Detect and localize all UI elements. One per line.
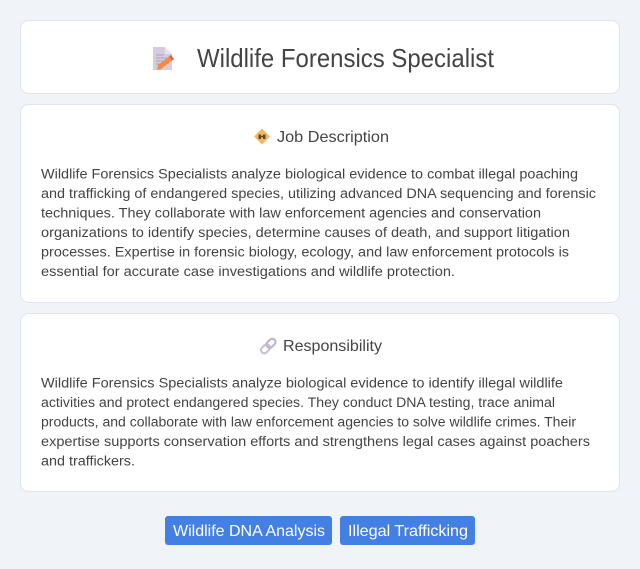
heading: responsibility: Responsibility: [283, 338, 382, 355]
tag: wildlife dna analysis: Wildlife DNA Analysis: [173, 523, 325, 540]
tag: illegal trafficking: Illegal Trafficking: [348, 523, 468, 540]
text block: responsibility: Wildlife Forensics Specialists analyze biological evidence to identify illegal wildlife: [41, 376, 563, 392]
text block: job description: and trafficking of endangered species, utilizing advanced DNA sequencing and forensic: [41, 186, 596, 202]
text block: job description: processes. Expertise in forensic biology, ecology, and law enforcement protocols is: [41, 244, 569, 260]
text block: responsibility: products, and collaborate with law enforcement agencies to solve wildlife crimes. Their: [41, 414, 576, 430]
tag: illegal trafficking: [340, 516, 475, 545]
panel: title card: [20, 20, 620, 94]
text block: job description: techniques. They collaborate with law enforcement agencies and conservation: [41, 206, 541, 222]
text block: job description: organizations to identify species, determine causes of death, and support litigation: [41, 225, 570, 241]
icon: document with pencil: [153, 47, 174, 70]
icon: chain link: [260, 337, 277, 355]
text block: job description: [41, 166, 596, 280]
text block: responsibility: [41, 376, 590, 470]
text block: job description: essential for accurate case investigations and wildlife protection.: [41, 264, 455, 280]
text block: job description: Wildlife Forensics Specialists analyze biological evidence to combat illegal poaching: [41, 166, 578, 182]
text block: responsibility: activities and protect endangered species. They conduct DNA testing, trace animal: [41, 395, 555, 411]
panel: responsibility: [20, 314, 620, 492]
tag: wildlife dna analysis: [165, 516, 332, 545]
icon: orange diamond: [254, 128, 270, 144]
text block: responsibility: and traffickers.: [41, 454, 135, 470]
heading: job description: Job Description: [277, 129, 389, 146]
title: Wildlife Forensics Specialist: [197, 45, 494, 73]
text block: responsibility: expertise supports conservation efforts and strengthens legal cases against poachers: [41, 434, 590, 450]
panel: job description: [20, 104, 620, 302]
